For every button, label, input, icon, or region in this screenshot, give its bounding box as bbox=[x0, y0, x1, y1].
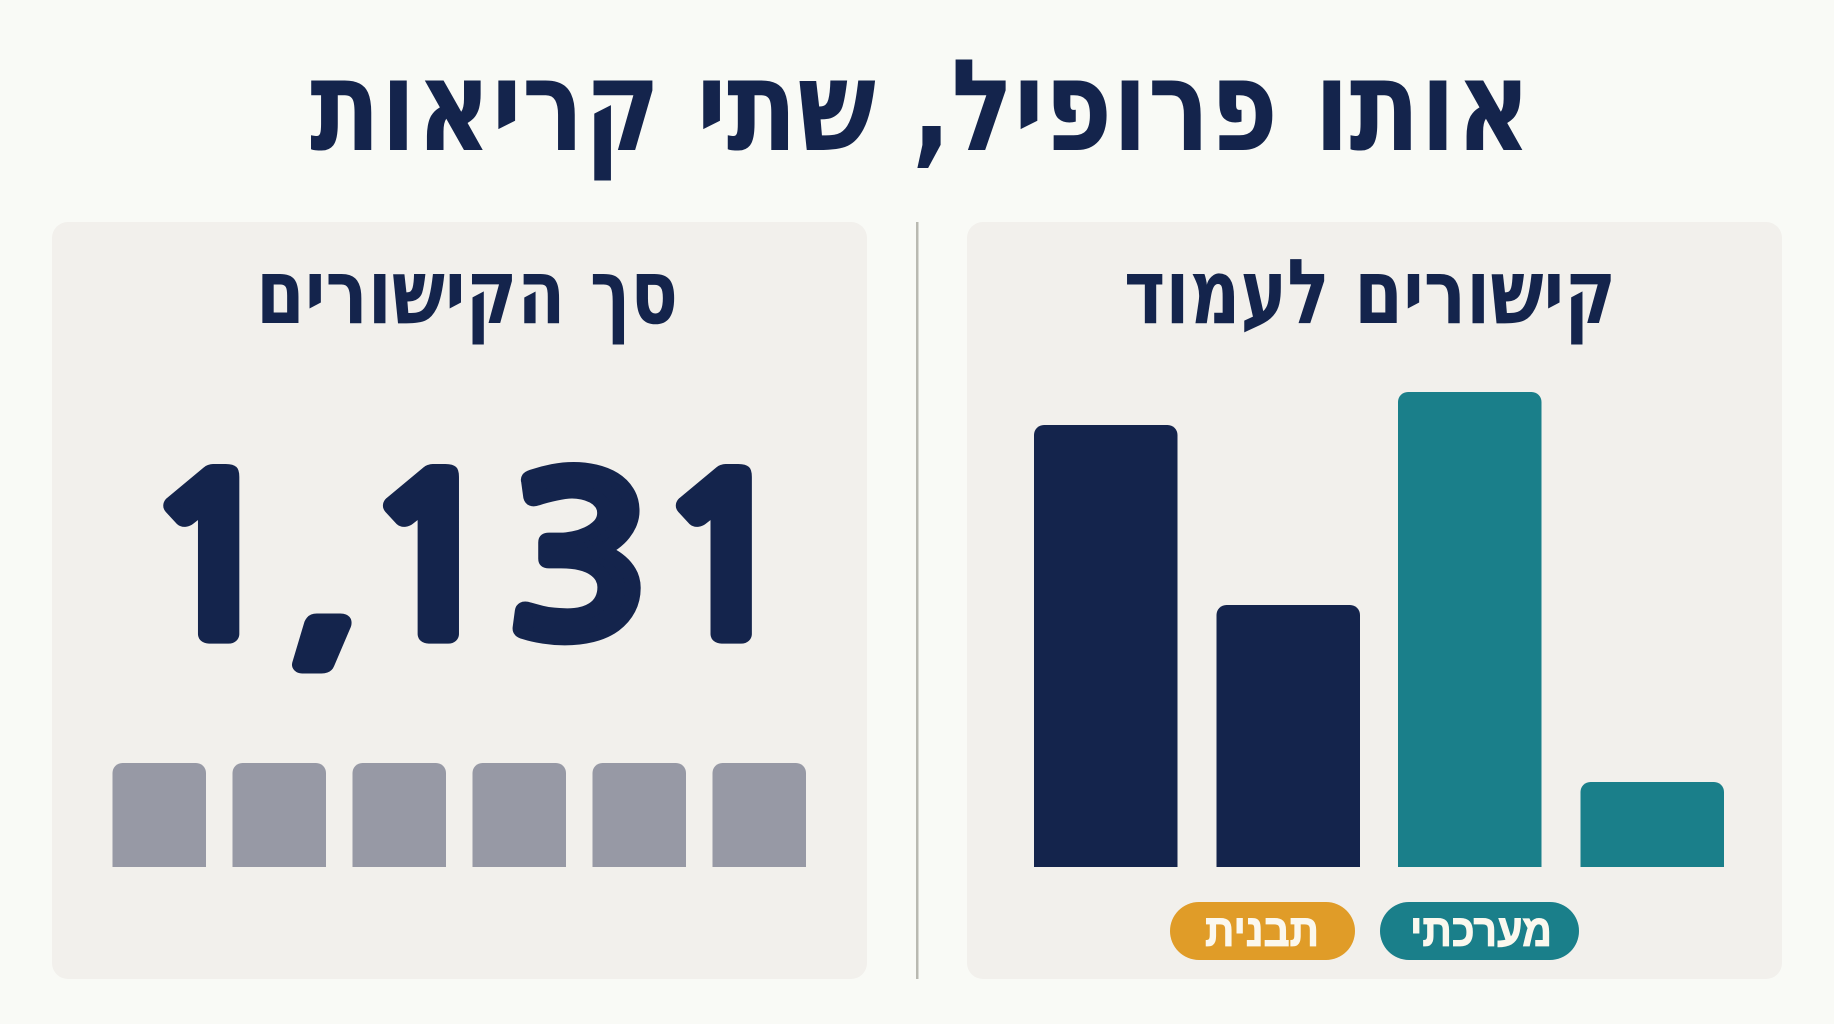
legend pill: template bbox=[1170, 902, 1355, 960]
legend pill: systemic: מערכתי bbox=[1410, 905, 1552, 956]
bar chart bbox=[1034, 392, 1724, 867]
panel: total links bbox=[52, 222, 867, 979]
heading: total links: סך הקישורים bbox=[256, 240, 678, 345]
heading: links per page: קישורים לעמוד bbox=[1124, 240, 1616, 345]
title: אותו פרופיל, שתי קריאות bbox=[310, 32, 1531, 181]
divider bbox=[916, 222, 918, 979]
six grey unit blocks bbox=[112, 763, 806, 867]
legend pill: systemic bbox=[1380, 902, 1579, 960]
panel: links per page bbox=[967, 222, 1782, 979]
big number: 1,131 bbox=[140, 454, 799, 669]
legend pill: template: תבנית bbox=[1205, 905, 1319, 956]
